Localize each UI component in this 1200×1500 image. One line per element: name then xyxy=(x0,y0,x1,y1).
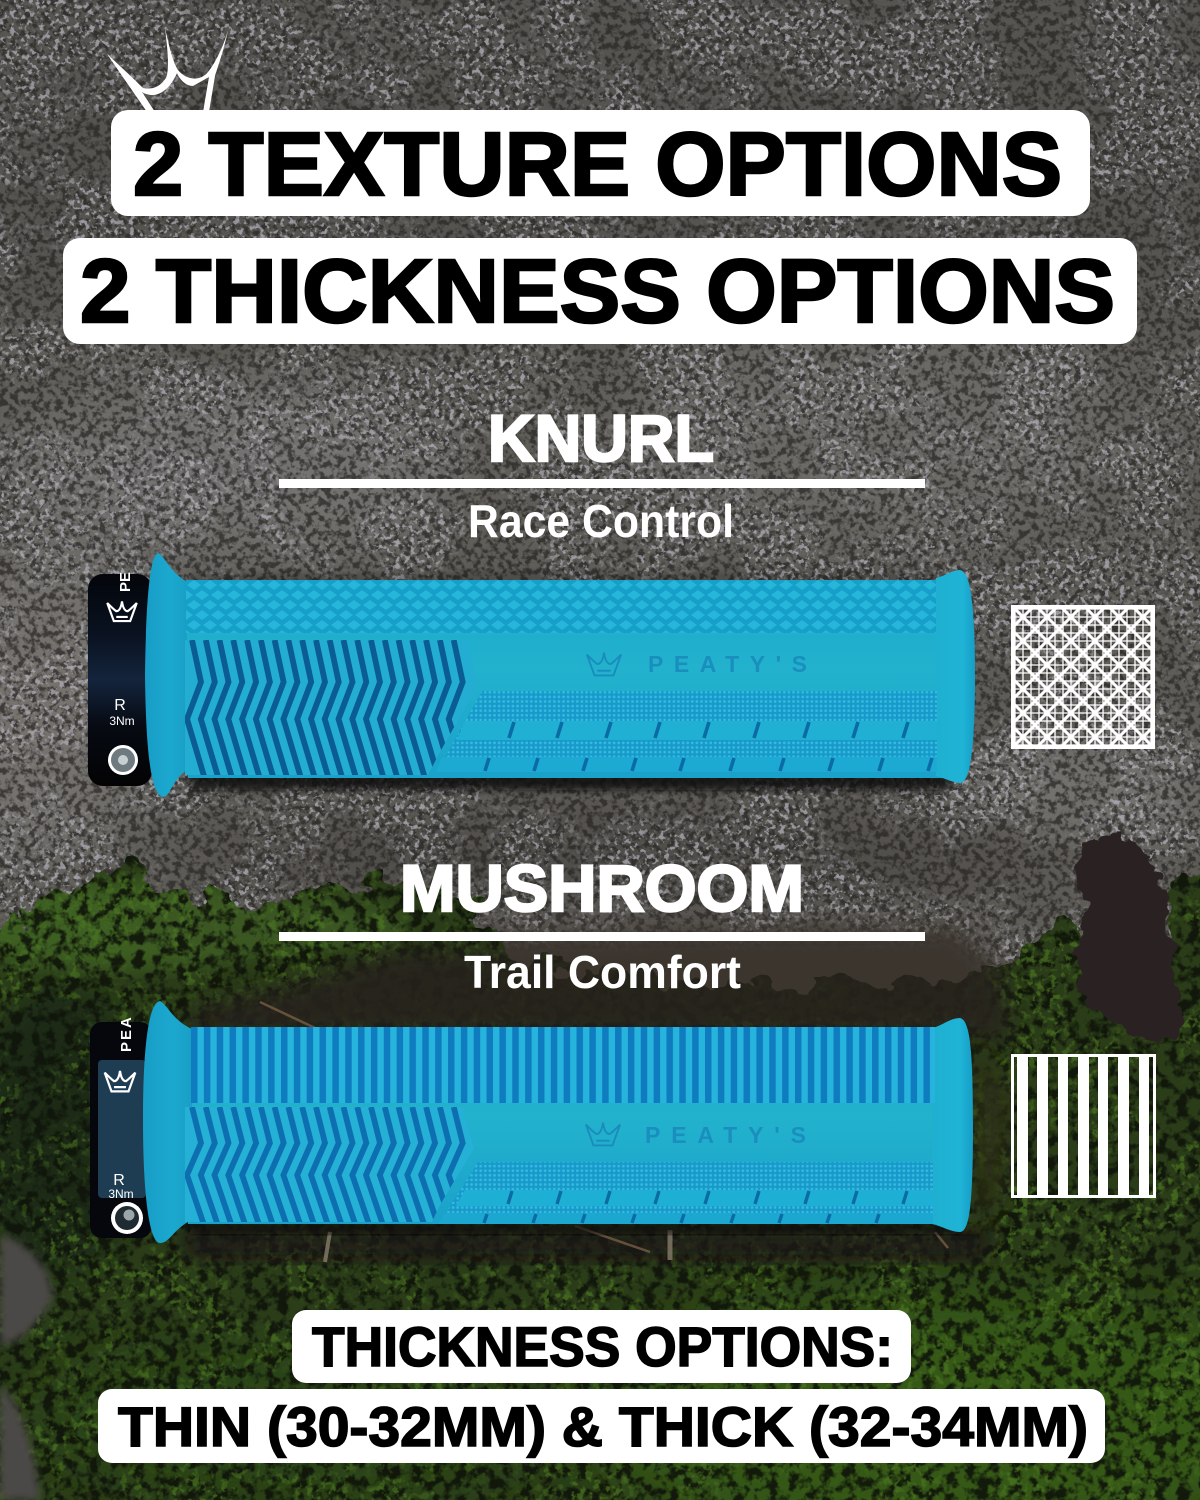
dotted strip with raised bars xyxy=(436,691,937,772)
crown logo xyxy=(107,28,228,112)
flange xyxy=(143,1001,192,1243)
footer: thin and thick sizes: THIN (30-32MM) & THICK (32-34MM) xyxy=(118,1395,1088,1458)
heading: 2 texture options: 2 TEXTURE OPTIONS xyxy=(133,115,1062,215)
chevrons xyxy=(185,640,481,776)
grip: mushroom xyxy=(90,1001,973,1243)
knurl texture xyxy=(186,580,936,633)
right end cap xyxy=(936,570,975,783)
label: mushroom: Trail Comfort xyxy=(464,946,741,998)
lock collar: R xyxy=(113,1172,125,1189)
lock collar xyxy=(88,572,152,786)
footer: thickness options: THICKNESS OPTIONS: xyxy=(312,1315,893,1378)
lock collar: 3Nm xyxy=(108,1187,134,1201)
brand mark: PEATY'S xyxy=(648,651,807,677)
shadow under grip xyxy=(190,1222,960,1234)
dark ground below the rock xyxy=(190,925,1040,1030)
ribs xyxy=(191,1027,935,1103)
soil patch at right xyxy=(1075,837,1185,1042)
texture swatch: mushroom xyxy=(1011,1054,1156,1198)
heading: 2 thickness options: 2 THICKNESS OPTIONS xyxy=(80,242,1115,342)
lock collar: PE xyxy=(117,572,134,592)
texture swatch: knurl xyxy=(1011,605,1155,749)
label: mushroom xyxy=(279,851,925,998)
lock collar: PEA xyxy=(118,1015,135,1052)
label: mushroom: MUSHROOM xyxy=(400,851,804,925)
flange xyxy=(145,553,187,797)
lock collar: 3Nm xyxy=(109,714,135,728)
label: knurl xyxy=(279,401,925,547)
label: knurl: KNURL xyxy=(488,401,714,475)
shadow around grip xyxy=(190,576,950,790)
body xyxy=(185,1030,945,1224)
grip: knurl xyxy=(88,553,975,797)
rock showing at bottom left xyxy=(0,1235,52,1500)
vegetation: moss, soil and litter xyxy=(0,800,1200,1500)
lock collar: R xyxy=(114,697,126,714)
brand mark: PEATY'S xyxy=(645,1122,806,1148)
dotted strip with raised bars xyxy=(438,1162,933,1224)
lock collar xyxy=(90,1015,152,1238)
label: knurl: Race Control xyxy=(468,495,734,547)
twigs xyxy=(260,1002,948,1262)
chevrons xyxy=(185,1107,481,1225)
right end cap xyxy=(932,1018,973,1232)
body xyxy=(185,581,945,778)
